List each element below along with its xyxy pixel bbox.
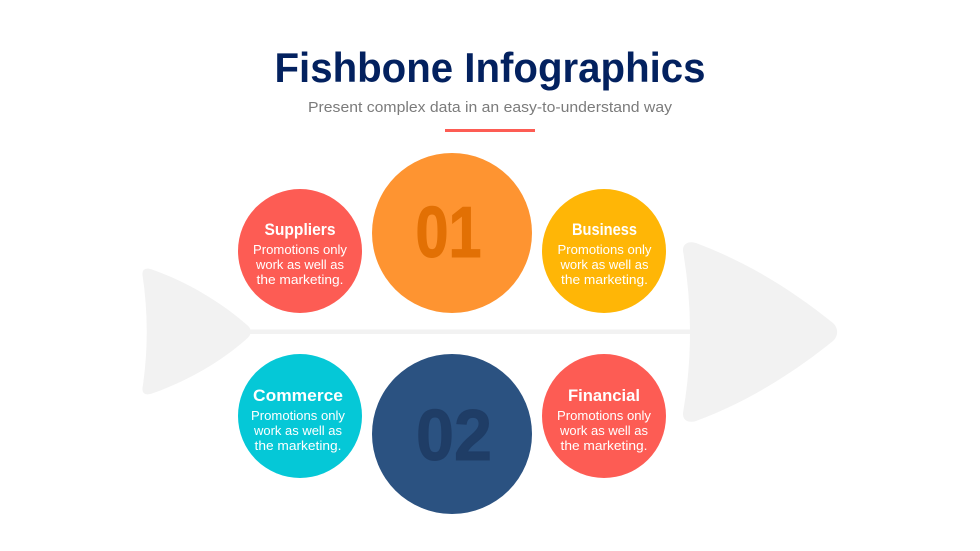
number 02: 02: [416, 396, 492, 476]
text: Business description: Promotions only: [558, 242, 652, 257]
text: Commerce description: the marketing.: [254, 438, 342, 453]
text: Suppliers description: Promotions only: [253, 242, 347, 257]
heading: Business: Business: [572, 221, 637, 239]
circle: Commerce: [238, 354, 362, 478]
fish head: [683, 242, 837, 422]
heading: Commerce: Commerce: [253, 387, 343, 405]
subtitle: Present complex data in an easy-to-understand way: [308, 99, 673, 116]
text: Financial description: Promotions only: [557, 408, 651, 423]
text: Business description: the marketing.: [561, 272, 648, 287]
text: Commerce description: Promotions only: [251, 408, 345, 423]
title underline: [445, 129, 535, 132]
fish diagram spine: [245, 330, 695, 334]
heading: Suppliers: Suppliers: [264, 221, 336, 239]
text: Suppliers description: the marketing.: [256, 272, 344, 287]
text: Financial description: the marketing.: [560, 438, 648, 453]
circle: Financial: [542, 354, 666, 478]
text: Suppliers description: work as well as: [255, 257, 344, 272]
heading: Financial: Financial: [568, 387, 640, 405]
circle: 01: [372, 153, 532, 313]
text: Business description: work as well as: [560, 257, 649, 272]
text: Commerce description: work as well as: [253, 423, 342, 438]
circle: 02: [372, 354, 532, 514]
circle: Suppliers: [238, 189, 362, 313]
circle: Business: [542, 189, 666, 313]
fish tail: [142, 269, 251, 394]
number 01: 01: [416, 193, 482, 273]
title: Fishbone Infographics: [274, 44, 706, 91]
text: Financial description: work as well as: [559, 423, 648, 438]
